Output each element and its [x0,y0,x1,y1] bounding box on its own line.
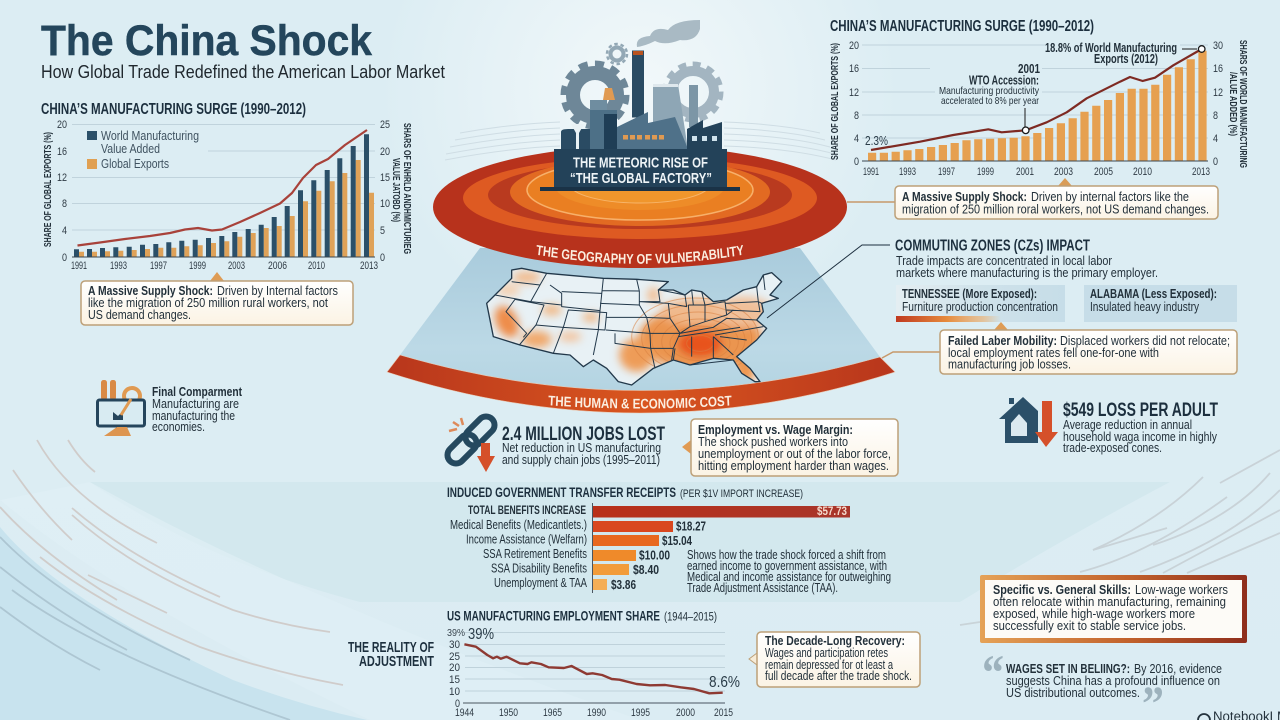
left chart right axis labels: 15 [380,172,390,184]
callout: employment vs wage margin [682,419,898,476]
text block: the reality of adjustment: THE REALITY OF [348,639,434,656]
callout: specific vs general skills: exposed, while high-wage workers more [993,606,1195,621]
right chart year labels [863,166,1210,178]
contour ripples [445,122,836,160]
title: The China Shock [41,17,372,65]
factory buildings [561,50,722,150]
transfer axis [592,503,594,593]
right chart year labels: 1993 [899,166,916,178]
transfer note: earned income to government assistance, with [687,559,887,573]
employment trend line [464,644,723,693]
right chart left axis labels: 16 [849,63,859,75]
callout: right supply shock: A Massive Supply Shock: [902,189,1027,204]
employment x axis labels [455,707,733,719]
bar: SSA retirement [483,547,670,562]
right chart right axis title: SHARS OF WORLD MANUFACTURING [1237,40,1249,168]
bar: medical benefits: $18.27 [676,520,706,534]
right chart export bars [868,51,1207,161]
left chart left axis labels: 20 [57,119,67,131]
right chart year labels: 2001 [1016,166,1034,178]
panel: government transfer receipts [447,484,891,595]
employment x axis labels: 1965 [543,707,562,719]
employment y axis labels [447,627,465,710]
label: 8.6 percent: 8.6% [709,674,740,691]
left chart left axis labels: 4 [62,225,67,237]
right chart right axis labels: 12 [1213,87,1223,99]
bar: income assistance [466,532,692,548]
left chart right axis labels: 0 [380,252,385,264]
annotation: WTO accession [939,61,1040,134]
factory smoke [637,20,700,47]
factory title plinth: THE METEORIC RISE OF [573,154,708,172]
subtitle: How Global Trade Redefined the American Labor Market [41,62,445,82]
left chart right axis title: VALUE JATOBD (%) [390,158,402,222]
commuting zones description: Trade impacts are concentrated in local labor [896,253,1113,268]
left chart left axis labels: 16 [57,146,67,158]
commuting zones heading: COMMUTING ZONES (CZs) IMPACT [895,238,1090,254]
card: Alabama [1084,285,1237,322]
right chart left axis labels [849,40,859,168]
left chart year labels: 1991 [71,260,87,272]
callout: decade-long recovery: The Decade-Long Recovery: [765,633,905,648]
bar: total benefits: $57.73 [817,506,847,518]
bar: SSA disability: $8.40 [633,563,659,577]
bar: unemployment and TAA: Unemployment & TAA [494,576,587,590]
callout: right supply shock: migration of 250 million roral workers, not US demand changes. [902,202,1209,216]
employment heading: (1944–2015) [664,612,717,624]
callout: left supply shock [81,272,353,325]
callout: decade-long recovery: remain depressed for ot least a [765,657,894,672]
text block: final comparment: Manufacturing are [152,396,239,411]
right chart year labels: 1991 [863,166,879,178]
right chart heading: CHINA’S MANUFACTURING SURGE (1990–2012) [830,18,1094,35]
left chart year labels: 2003 [228,260,245,272]
callout: failed labor mobility: manufacturing job losses. [948,356,1071,372]
annotation: WTO accession: accelerated to 8% per year [941,95,1039,107]
panel: right manufacturing chart [829,18,1249,178]
callout: left supply shock: US demand changes. [88,307,191,322]
pull quote: wages set in Beijing: “ [982,644,1004,700]
callout: failed labor mobility: Displaced workers did not relocate; [1060,333,1230,348]
callout: employment vs wage margin: hitting employment harder than wages. [698,458,889,473]
left chart legend: Value Added [101,141,160,156]
left chart year labels: 1993 [110,260,127,272]
callout: employment vs wage margin: unemployment or out of the labor force, [698,446,891,461]
panel: commuting zones [895,238,1237,322]
bar: income assistance: $15.04 [662,534,692,548]
red target disk [433,146,847,268]
right chart left axis labels: 12 [849,87,859,99]
right chart right axis title: /ALUE ADDED (%) [1227,72,1239,136]
map leader line [767,245,890,318]
stat: 549 loss per adult: household waga income in highly [1063,429,1217,444]
icon: broken chain [444,413,498,472]
left chart trend line [78,130,367,246]
annotation: 18.8 percent [1045,40,1205,66]
right chart year labels: 1999 [977,166,994,178]
gear small [607,44,627,64]
left chart right axis labels: 10 [380,198,390,210]
commuting zones description [896,253,1158,280]
bar: SSA retirement: SSA Retirement Benefits [483,547,587,561]
left chart year labels: 1999 [189,260,206,272]
callout: specific vs general skills: Low-wage workers [1135,582,1228,597]
employment x axis labels: 2015 [714,707,733,719]
annotation: WTO accession: Manufacturing productivity [939,85,1040,97]
left chart left axis labels: 8 [62,198,67,210]
left chart right axis labels: 25 [380,119,390,131]
right chart right axis labels: 30 [1213,40,1223,52]
right chart left axis labels: 20 [849,40,859,52]
left chart value added bars [74,134,369,257]
stat: 2.4 million jobs lost: Net reduction in US manufacturing [502,440,661,455]
callout: decade-long recovery [749,632,920,687]
bar: income assistance: Income Assistance (Welfarn) [466,532,587,546]
background swooshes [0,440,1280,720]
right chart year labels: 2003 [1054,166,1073,178]
transfer note: Shows how the trade shock forced a shift from [687,548,886,562]
text block: final comparment: manufacturing the [152,408,235,423]
crescent band [387,355,895,413]
stat: 2.4 million jobs lost [502,424,665,467]
panel: left manufacturing chart [41,101,413,272]
bar: total benefits: TOTAL BENEFITS INCREASE [468,503,586,517]
right chart year labels: 2005 [1094,166,1113,178]
left chart right axis labels: 20 [380,146,390,158]
left chart right axis labels [380,119,390,264]
callout: decade-long recovery: full decade after the trade shock. [765,668,912,683]
callout: specific vs general skills: Specific vs. General Skills: [993,582,1131,597]
right chart right axis labels [1213,40,1223,168]
text block: final comparment: Final Comparment [152,384,243,399]
employment y axis labels: 30 [449,639,460,651]
icon: factory monitor [98,380,144,436]
text block: final comparment [152,384,243,434]
right chart year labels: 1997 [938,166,955,178]
stat: 549 loss per adult: trade-exposed cones. [1063,440,1162,455]
bar: medical benefits: Medical Benefits (Medicantlets.) [450,518,587,532]
employment y axis labels: 39% [447,627,465,639]
stat: 549 loss per adult: Average reduction in annual [1063,417,1192,432]
crescent caption: THE HUMAN & ECONOMIC COST [548,396,732,409]
panel: center factory and funnel [386,20,910,448]
stat: 2.4 million jobs lost: and supply chain jobs (1995–2011) [502,452,660,467]
left chart left axis title: SHARE OF GLOBAL EXPORTS (%) [42,132,54,247]
pull quote: wages set in Beijing: WAGES SET IN BELIING?: [1006,661,1130,676]
left chart year labels: 1997 [150,260,167,272]
pull quote: wages set in Beijing: By 2016, evidence [1134,661,1222,676]
right chart right axis labels: 0 [1213,156,1218,168]
card: Tennessee: Furniture production concentration [902,299,1058,314]
employment x axis labels: 1990 [587,707,606,719]
pull quote: wages set in Beijing [982,644,1222,720]
map of US exposure [487,268,782,385]
left chart heading: CHINA’S MANUFACTURING SURGE (1990–2012) [41,101,306,118]
callout: employment vs wage margin: Employment vs. Wage Margin: [698,422,853,437]
pull quote: wages set in Beijing: US distributional outcomes. [1006,685,1140,700]
right chart trend line [871,49,1202,150]
gear left [564,64,626,126]
bar: SSA retirement: $10.00 [639,548,670,562]
bar: unemployment and TAA: $3.86 [611,578,636,592]
transfer heading: (PER $1V IMPORT INCREASE) [680,488,803,500]
transfer note [687,548,891,595]
right chart right axis labels: 16 [1213,63,1223,75]
transfer heading: INDUCED GOVERNMENT TRANSFER RECEIPTS [447,484,676,500]
annotation: 2.3 percent: 2.3% [865,133,888,148]
left chart year labels: 2006 [268,260,287,272]
pull quote: wages set in Beijing: suggests China has a profound influence on [1006,673,1220,688]
disk caption: THE GEOGRAPHY OF VULNERABILITY [536,245,743,264]
employment x axis labels: 1944 [455,707,474,719]
bar: SSA disability: SSA Disability Benefits [491,562,587,576]
factory title plinth [540,149,740,191]
employment x axis labels: 1995 [631,707,650,719]
card: Alabama: Insulated heavy industry [1090,299,1199,314]
callout: left supply shock: Driven by Internal factors [217,283,338,298]
right chart right axis labels: 8 [1213,110,1218,122]
callout: failed labor mobility [940,322,1237,374]
commuting zones description: markets where manufacturing is the primary employer. [896,265,1158,280]
callout: specific vs general skills [980,575,1247,643]
callout: left supply shock: like the migration of 250 million rural workers, not [88,295,328,310]
left chart legend: World Manufacturing [101,128,199,143]
left chart left axis labels: 12 [57,172,67,184]
label: 39 percent: 39% [468,626,494,643]
bar: SSA disability [491,562,659,577]
callout: failed labor mobility: local employment rates fell one-for-one with [948,345,1159,360]
left chart right axis title [390,123,413,254]
text block: final comparment: economies. [152,419,205,434]
left chart legend: Global Exports [101,156,169,171]
employment y axis labels: 25 [449,651,460,663]
annotation: WTO accession: 2001 [1018,61,1040,76]
employment heading: US MANUFACTURING EMPLOYMENT SHARE [447,608,660,624]
stat: 549 loss per adult: $549 LOSS PER ADULT [1063,400,1218,421]
left chart right axis title: SHARS OF ENHRLD ANDHMICTURIEG [401,123,413,254]
connector: band to failed mobility callout [882,352,940,358]
factory title plinth: “THE GLOBAL FACTORY” [570,170,712,187]
text block: the reality of adjustment: ADJUSTMENT [359,653,434,670]
right chart left axis labels: 0 [854,156,859,168]
icon: house with down arrow [999,397,1058,447]
right chart right axis labels: 4 [1213,133,1218,145]
annotation: 18.8 percent: 18.8% of World Manufacturing [1045,40,1177,55]
callout: failed labor mobility: Failed Laber Mobility: [948,333,1057,348]
panel: employment share line chart [447,608,740,719]
employment y axis labels: 0 [455,698,460,710]
callout: specific vs general skills: successfully exit to stable service jobs. [993,618,1186,633]
right chart left axis labels: 4 [854,133,859,145]
bar: medical benefits [450,518,706,534]
right chart left axis labels: 8 [854,110,859,122]
right chart right axis title [1227,40,1249,168]
right chart year labels: 2013 [1192,166,1210,178]
stat: 2.4 million jobs lost: 2.4 MILLION JOBS LOST [502,424,665,445]
transfer note: Medical and income assistance for outweighing [687,570,891,584]
left chart left axis labels: 0 [62,252,67,264]
callout: right supply shock [895,178,1218,219]
annotation: 18.8 percent: Exports (2012) [1094,51,1158,66]
callout: employment vs wage margin: The shock pushed workers into [698,434,848,449]
employment y axis labels: 15 [449,674,460,686]
gear right [665,64,721,120]
left chart year labels: 2013 [360,260,378,272]
callout: specific vs general skills: often relocate within manufacturing, remaining [993,594,1226,609]
employment y axis labels: 20 [449,662,460,674]
left chart year labels [71,260,378,272]
employment x axis labels: 2000 [676,707,695,719]
card: Tennessee [896,285,1065,322]
card: Alabama: ALABAMA (Less Exposed): [1090,286,1217,301]
card: Tennessee: TENNESSEE (More Exposed): [902,286,1037,301]
text block: the reality of adjustment [348,639,434,670]
left chart right axis labels: 5 [380,225,385,237]
left chart legend [87,128,199,171]
left chart export bars [79,160,374,257]
callout: right supply shock: Driven by internal factors like the [1031,189,1189,204]
employment x axis labels: 1950 [499,707,518,719]
left chart year labels: 2010 [308,260,325,272]
callout: left supply shock: A Massive Supply Shock: [88,283,213,298]
connector: disk to top right callout [847,201,895,203]
employment y axis labels: 10 [449,686,460,698]
callout: decade-long recovery: Wages and participation retes [765,645,888,660]
left chart left axis labels [57,119,67,264]
transfer note: Trade Adjustment Assistance (TAA). [687,581,838,595]
funnel cone [400,248,880,391]
stat: 549 loss per adult [1063,400,1218,455]
right chart year labels: 2010 [1133,166,1152,178]
bar: total benefits [468,503,850,518]
annotation: WTO accession: WTO Accession: [969,72,1039,88]
